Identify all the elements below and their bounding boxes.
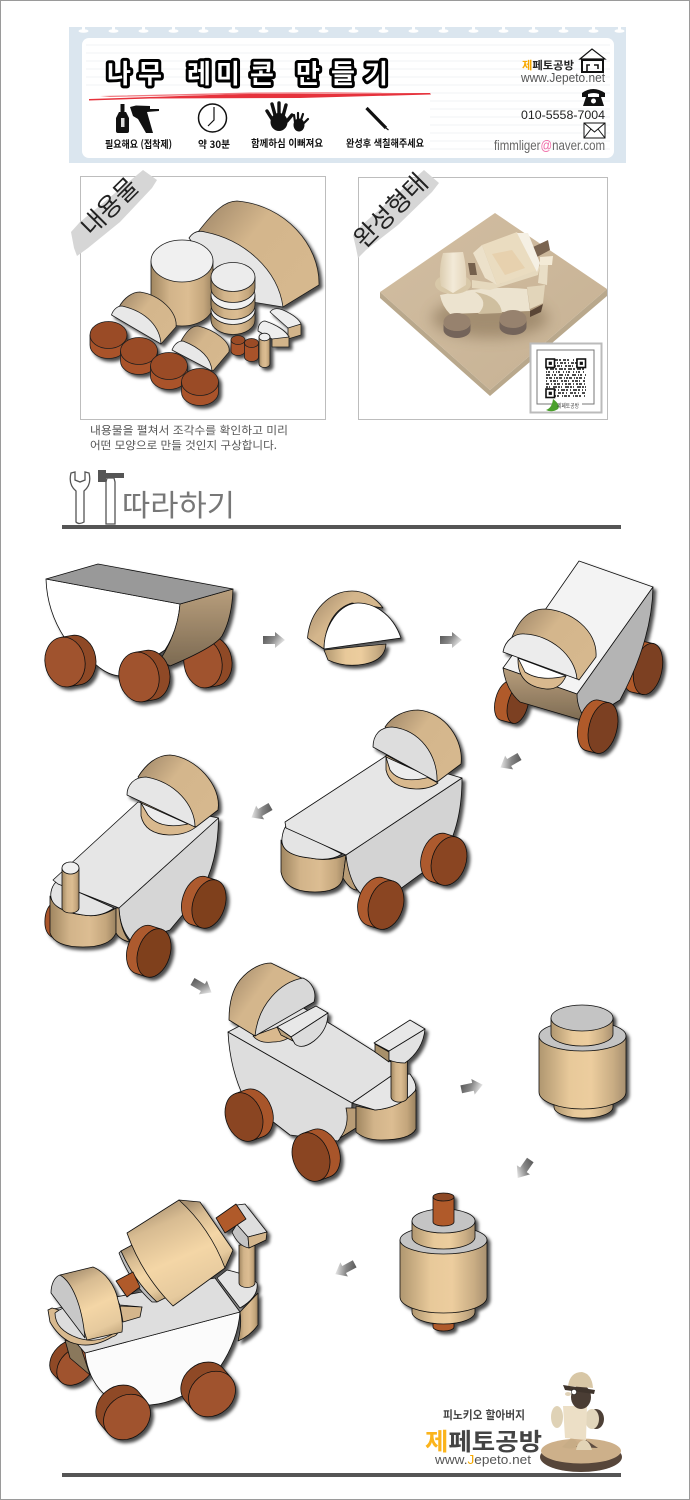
right wheel	[176, 872, 232, 933]
top surface	[228, 1000, 391, 1103]
contact block: fimmliger@naver.com	[494, 138, 605, 153]
dark side wedge	[65, 1340, 90, 1375]
arrow 5	[188, 975, 216, 999]
top surface	[48, 1278, 240, 1353]
front wheel	[286, 1124, 347, 1187]
QR code card: 제페토공방	[557, 402, 579, 410]
panel: contents	[71, 169, 326, 420]
toy tail post	[538, 256, 553, 285]
toy tail half	[527, 285, 545, 309]
contents banner: 내용물	[72, 169, 146, 243]
toy front dome	[440, 252, 466, 293]
rear wheel	[415, 829, 473, 890]
peg	[386, 755, 438, 789]
figure head	[563, 1372, 595, 1409]
toy body	[440, 288, 530, 314]
main drum	[400, 1240, 487, 1313]
rear half cylinder	[238, 1293, 258, 1341]
back left wheel	[42, 1332, 103, 1393]
icon: pen	[366, 108, 388, 130]
icon: envelope	[584, 123, 605, 138]
main drum	[127, 1200, 225, 1306]
red puck 1	[90, 322, 127, 358]
figure arms	[551, 1406, 604, 1429]
rod top	[433, 1197, 454, 1226]
front wheel	[115, 647, 174, 705]
dome face	[255, 978, 315, 1036]
arrow 7	[511, 1155, 537, 1183]
left ring	[121, 1244, 167, 1302]
toy lower rod	[468, 263, 477, 275]
rear half cylinder	[356, 1090, 416, 1140]
front half cylinder	[281, 840, 346, 892]
top surface	[53, 802, 218, 908]
arrow 8	[332, 1257, 358, 1281]
dome side	[60, 1267, 122, 1340]
half disc pieces	[258, 309, 301, 347]
base cylinder	[324, 644, 386, 665]
finished banner: 완성형태	[344, 164, 435, 255]
logo block	[425, 1372, 622, 1472]
front wheel	[87, 1376, 160, 1449]
section heading: follow along	[70, 470, 235, 525]
icon: glue bottle and glue gun	[116, 104, 159, 133]
icon: telephone	[582, 89, 605, 106]
heading text: 따라하기	[122, 481, 235, 525]
caption: 어떤 모양으로 만들 것인지 구상합니다.	[90, 437, 277, 453]
half cylinder small A	[112, 292, 176, 344]
arrow 2	[440, 632, 462, 648]
rear wheel	[180, 633, 236, 691]
caption	[90, 422, 288, 453]
side	[228, 1032, 352, 1141]
post	[62, 862, 79, 913]
stack of discs	[211, 262, 255, 334]
dome side	[308, 591, 383, 649]
half cylinder small B	[172, 326, 229, 371]
bottom rule	[62, 1473, 621, 1477]
dome face	[51, 1275, 85, 1338]
icon labels	[105, 135, 424, 151]
red puck 4	[182, 368, 218, 406]
upper rod	[216, 1204, 246, 1233]
post	[239, 1245, 255, 1288]
icon: house	[580, 49, 605, 72]
figure torso	[563, 1406, 587, 1440]
left wheel	[219, 1084, 280, 1147]
contact block: 제페토공방	[522, 57, 574, 73]
header banner	[69, 27, 626, 163]
toy peg	[435, 274, 471, 294]
left wheel	[41, 632, 100, 690]
small red pegs	[231, 336, 258, 362]
lower collar	[412, 1300, 475, 1324]
front wheel	[121, 921, 177, 982]
rear disc	[217, 1270, 257, 1308]
side	[346, 778, 462, 900]
front half cylinder	[50, 896, 116, 947]
dome face	[373, 727, 437, 782]
contact block: www.Jepeto.net	[520, 71, 605, 85]
left ring grey edge	[119, 1251, 157, 1302]
cylinder assembly A	[539, 1005, 626, 1118]
dome face	[324, 603, 401, 649]
step 3: body with dome, rear view	[491, 561, 667, 757]
arrow 6	[460, 1077, 484, 1097]
cylinder assembly B	[400, 1193, 487, 1331]
top surface	[503, 561, 653, 694]
back wheel right	[618, 638, 667, 697]
small half disc	[277, 1006, 328, 1046]
section rule	[62, 525, 621, 529]
stump	[540, 1438, 622, 1472]
toy left ring	[473, 245, 497, 285]
icon labels: 약 30분	[198, 136, 230, 151]
step 8: finished mixer truck	[42, 1200, 267, 1449]
arrow 1	[263, 632, 285, 648]
toy drum cap	[517, 233, 540, 272]
icon: hands	[267, 103, 308, 132]
dome side	[385, 710, 461, 782]
head wedge	[374, 1020, 425, 1063]
finished wooden toy	[435, 232, 553, 338]
logo name: 제페토공방	[425, 1422, 542, 1457]
large cylinder	[151, 240, 213, 326]
red puck 3	[150, 352, 188, 390]
upper collar	[412, 1221, 475, 1249]
peg	[253, 1025, 292, 1042]
head wedge	[232, 1204, 267, 1248]
front surface	[503, 668, 588, 722]
upper collar	[551, 1018, 613, 1046]
dome face	[127, 777, 195, 827]
logo tagline: 피노키오 할아버지	[443, 1407, 525, 1423]
side surface	[577, 587, 653, 720]
front wheel	[352, 873, 410, 934]
top surface	[285, 756, 462, 855]
icon labels: 완성후 색칠해주세요	[346, 135, 424, 150]
step 4: body with front half	[281, 710, 473, 934]
rod bottom	[433, 1320, 454, 1331]
left wheel	[491, 679, 533, 726]
QR pattern	[546, 360, 586, 396]
dome side	[229, 963, 304, 1036]
contents: wooden pieces	[90, 201, 319, 406]
small wedge	[100, 1281, 142, 1322]
panel: finished	[344, 164, 608, 420]
wooden board	[380, 213, 607, 396]
icon: clock	[198, 104, 226, 132]
peg	[141, 800, 196, 835]
contact block	[494, 49, 605, 153]
icon labels: 함께하심 이뻐져요	[251, 135, 323, 150]
caption: 내용물을 펼쳐서 조각수를 확인하고 미리	[90, 422, 288, 438]
toy upper plate	[472, 266, 540, 290]
icon: hammer	[98, 470, 124, 524]
lower collar	[554, 1095, 613, 1118]
icon labels: 필요해요 (접착제)	[105, 136, 172, 151]
arrow 3	[496, 750, 524, 774]
side	[160, 589, 233, 666]
step 2: dome piece	[308, 591, 401, 665]
figure legs	[562, 1437, 598, 1450]
QR leaf logo	[546, 399, 559, 411]
top	[46, 564, 233, 604]
body	[85, 1312, 240, 1405]
icon: wrench	[70, 472, 90, 524]
toy wheel 2	[500, 310, 526, 335]
right wheel	[172, 1353, 245, 1426]
step 1: body with wheels	[41, 564, 236, 705]
dome side	[512, 609, 596, 680]
logo url: www.Jepeto.net	[434, 1452, 531, 1467]
step 6: body seen from other side	[219, 963, 425, 1187]
side	[119, 818, 218, 942]
peg	[518, 658, 566, 689]
board shadow under toy	[432, 298, 548, 338]
hidden left wheel	[45, 903, 54, 938]
body	[46, 579, 180, 676]
right ring	[179, 1200, 233, 1268]
red puck 2	[120, 338, 158, 374]
step 5: body with post	[45, 755, 232, 982]
title: 나무 레미콘 만들기	[107, 54, 388, 91]
red underline	[89, 92, 431, 100]
toy drum	[482, 232, 537, 285]
arrow 4	[247, 800, 275, 824]
dome face	[503, 634, 577, 679]
lower rod	[116, 1272, 140, 1297]
QR code card	[530, 344, 602, 412]
stick	[259, 333, 270, 368]
large half cylinder	[189, 201, 319, 307]
front wheel	[572, 697, 623, 757]
wooden figure on stump	[540, 1372, 622, 1472]
main drum	[539, 1036, 626, 1109]
contact block: 010-5558-7004	[521, 108, 605, 122]
toy wheel 1	[444, 313, 470, 338]
toy rod	[533, 240, 550, 257]
post	[391, 1056, 408, 1102]
peg disc	[55, 1307, 118, 1340]
dome side	[138, 755, 218, 827]
front crescent	[48, 1308, 118, 1345]
